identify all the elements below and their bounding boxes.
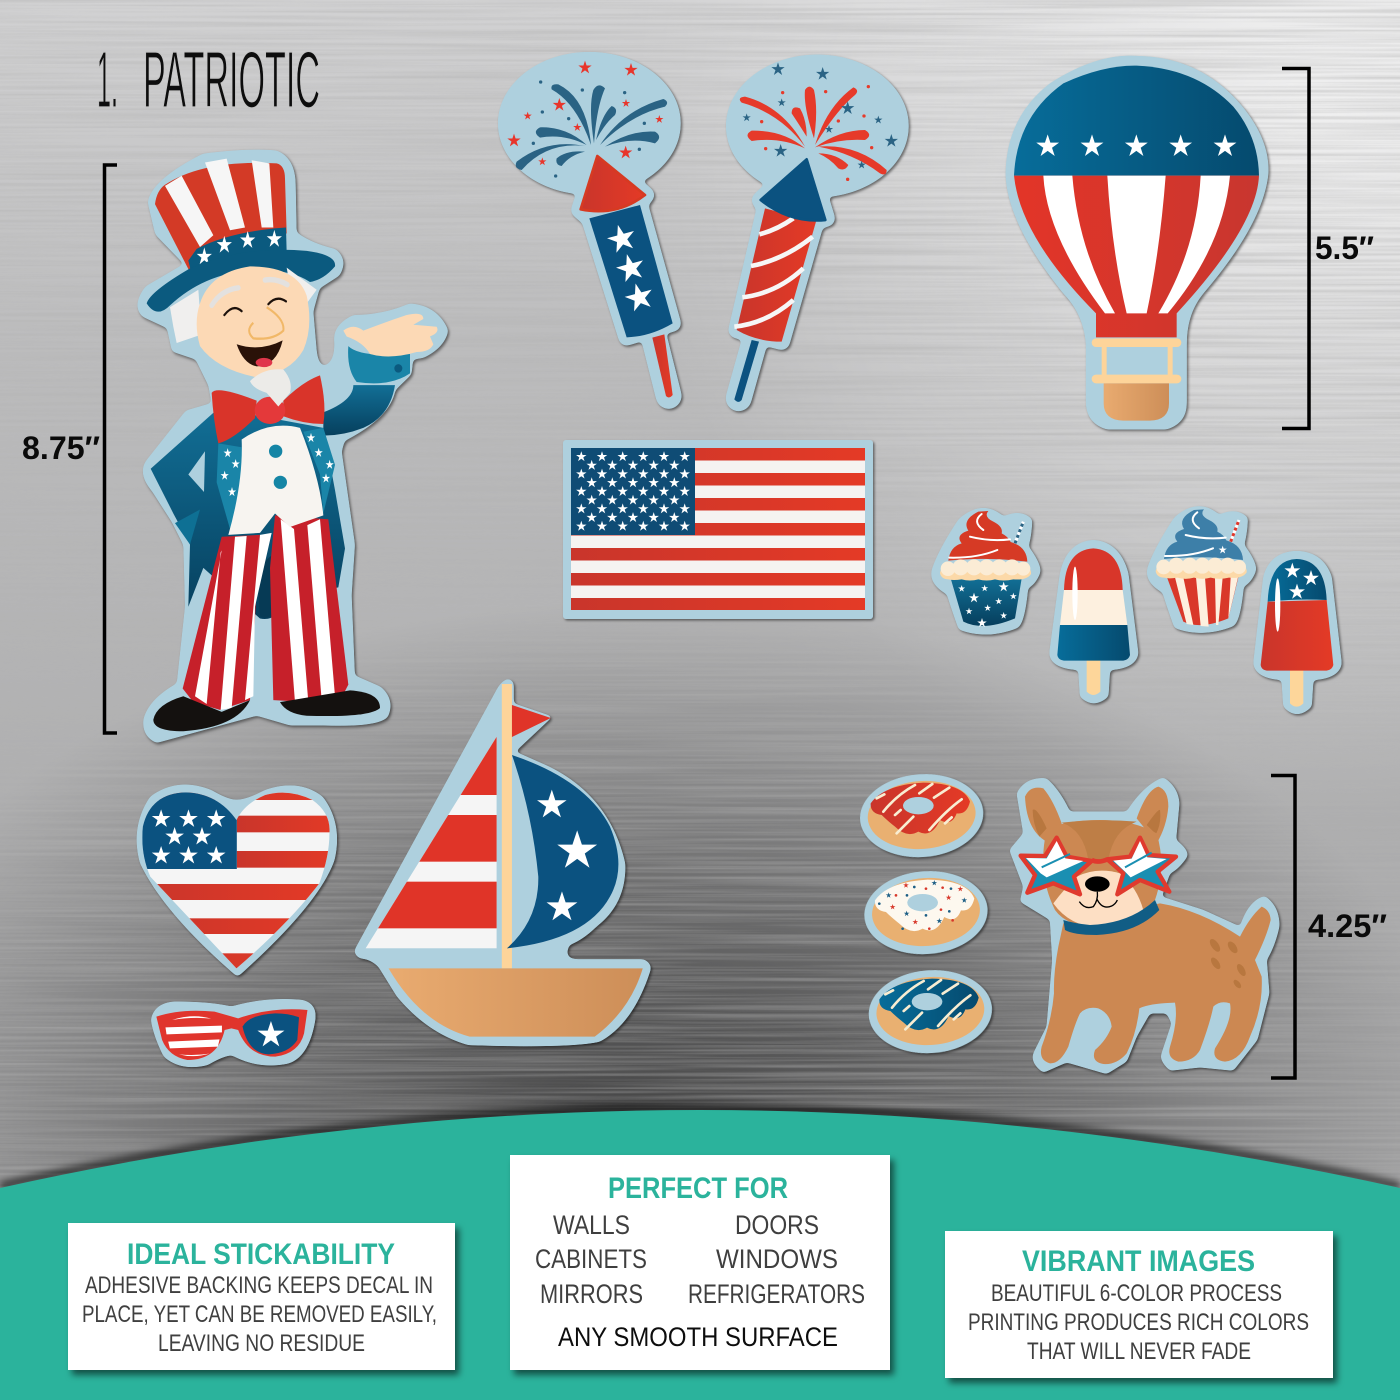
panel: perfect for <box>510 1155 890 1370</box>
firework burst: blue <box>516 84 667 170</box>
coat <box>151 408 345 619</box>
panel: ideal stickability <box>68 1223 455 1370</box>
sticker: hot air balloon <box>1006 56 1268 429</box>
bow tie and goatee <box>212 369 324 443</box>
dimension: 4.25 inches: 4.25″ <box>1308 908 1387 944</box>
dog body <box>1041 903 1271 1064</box>
sticker: blue and red popsicle <box>1253 551 1342 714</box>
face <box>170 266 317 377</box>
surface list: REFRIGERATORS <box>688 1279 865 1309</box>
hand <box>343 314 437 356</box>
pants <box>183 515 348 710</box>
surface list: DOORS <box>735 1210 819 1240</box>
heading: VIBRANT IMAGES <box>1022 1245 1255 1278</box>
shadow above teal band <box>0 1108 1400 1186</box>
bracket: Uncle Sam height <box>104 165 117 733</box>
sticker: blue-tipped rocket <box>726 55 909 402</box>
surface list: CABINETS <box>535 1244 647 1274</box>
sticker: Uncle Sam <box>139 152 447 741</box>
sticker: red white blue popsicle <box>1049 540 1138 703</box>
collar <box>1063 900 1159 935</box>
closing line: ANY SMOOTH SURFACE <box>558 1322 838 1352</box>
firework burst: red <box>740 87 887 174</box>
dimension: 8.75 inches: 8.75″ <box>22 430 100 466</box>
body text: ADHESIVE BACKING KEEPS DECAL IN <box>85 1272 433 1299</box>
hat <box>147 159 335 312</box>
surface list <box>535 1210 865 1309</box>
body text: PRINTING PRODUCES RICH COLORS <box>968 1309 1309 1336</box>
raised arm <box>323 385 395 436</box>
body text <box>968 1280 1309 1365</box>
sticker: cupcake with blue cup <box>933 510 1039 633</box>
teal band <box>0 1110 1400 1400</box>
sticker: sunglasses <box>151 999 316 1067</box>
title <box>97 35 320 124</box>
body text <box>82 1272 437 1357</box>
panel: vibrant images <box>945 1231 1333 1378</box>
surface list: MIRRORS <box>540 1279 643 1309</box>
surface list: WINDOWS <box>716 1244 838 1274</box>
star glasses <box>1021 838 1176 894</box>
body text: THAT WILL NEVER FADE <box>1027 1338 1251 1365</box>
sticker: American flag heart <box>130 785 340 976</box>
sticker: sailboat <box>355 679 651 1046</box>
bracket: balloon height <box>1282 68 1309 428</box>
sticker: red-tipped rocket <box>498 52 681 397</box>
sticker: blue donut <box>866 966 995 1057</box>
sticker: dog with star glasses <box>1009 777 1279 1074</box>
body text: PLACE, YET CAN BE REMOVED EASILY, <box>82 1301 437 1328</box>
sticker: white sprinkle donut <box>862 867 990 958</box>
title: 1. <box>97 35 118 124</box>
vest <box>228 426 323 535</box>
sticker: American flag <box>563 440 873 619</box>
sticker: cupcake with striped cup <box>1148 508 1255 631</box>
sticker: red donut <box>857 770 986 861</box>
heading: IDEAL STICKABILITY <box>127 1238 395 1271</box>
body text: LEAVING NO RESIDUE <box>158 1330 365 1357</box>
text: PATRIOTIC <box>143 35 320 124</box>
heading: PERFECT FOR <box>608 1172 788 1205</box>
surface list: WALLS <box>553 1210 630 1240</box>
bracket: dog height <box>1271 776 1295 1078</box>
lapels with stars <box>217 428 335 529</box>
dimension: 5.5 inches: 5.5″ <box>1315 230 1374 266</box>
dog head <box>1025 788 1062 843</box>
shoes <box>153 696 250 731</box>
body text: BEAUTIFUL 6-COLOR PROCESS <box>991 1280 1282 1307</box>
